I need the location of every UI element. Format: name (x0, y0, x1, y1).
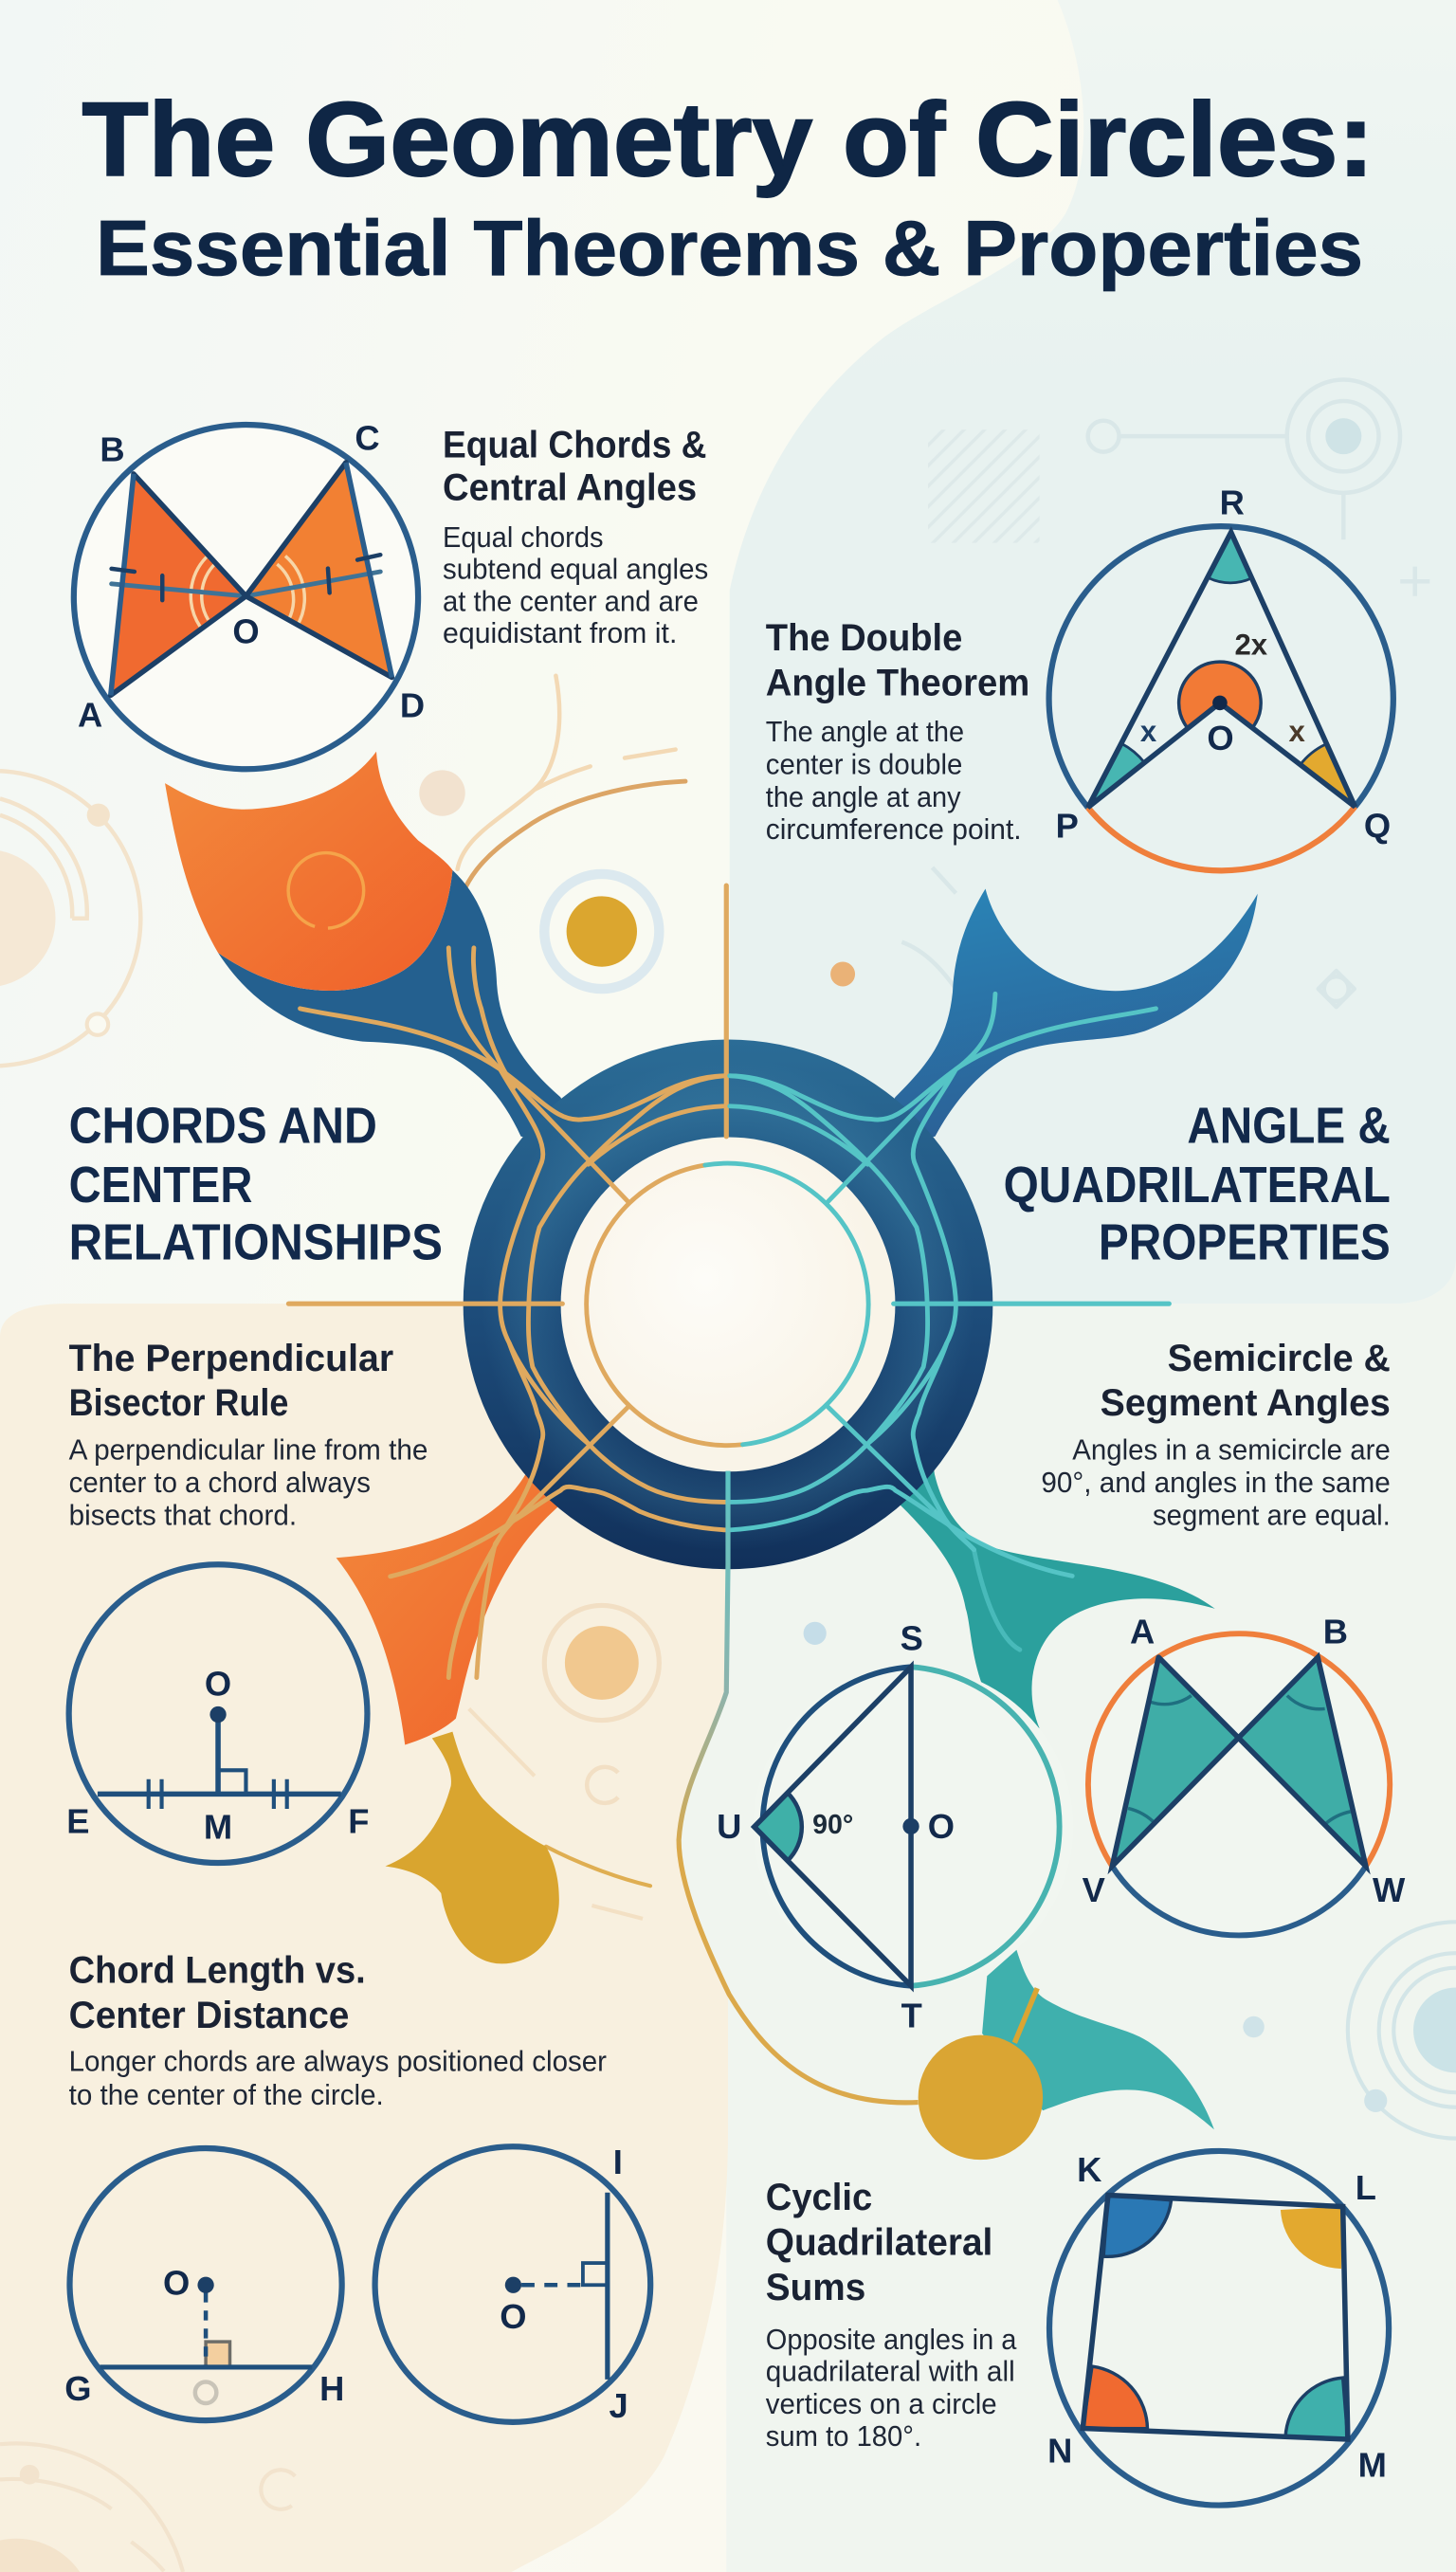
diagram: same segment angles: A (1130, 1613, 1155, 1651)
diagram: perpendicular bisector (66, 1564, 369, 1863)
diagram: semicircle: 90° (812, 1810, 853, 1840)
diagram: cyclic quadrilateral (1047, 2150, 1389, 2506)
panel: equal chords text: Central Angles (443, 467, 697, 509)
diagram: equal chords: O (232, 611, 260, 650)
diagram: perpendicular bisector: M (204, 1807, 232, 1846)
panel: equal chords text: subtend equal angles (443, 555, 708, 586)
icon: gold target (544, 874, 659, 989)
diagram: double angle: P (1056, 806, 1079, 845)
section heading: left: CENTER (69, 1157, 252, 1213)
decoration: peach target (469, 1605, 659, 1919)
diagram: long chord: G (64, 2369, 91, 2408)
panel: chord length text: Longer chords are always positioned closer (69, 2047, 607, 2078)
panel: semicircle text (1041, 1338, 1391, 1532)
panel: semicircle text: Angles in a semicircle are (1072, 1435, 1391, 1467)
decoration: cream dot (419, 770, 465, 816)
diagram: equal chords: A (78, 696, 102, 735)
panel: perpendicular bisector text: The Perpendicular (69, 1338, 393, 1379)
diagram: double angle: x (1140, 715, 1157, 748)
panel: equal chords text: Equal chords (443, 522, 604, 554)
diagram: semicircle: O (928, 1807, 955, 1846)
section heading: left: CHORDS AND (69, 1098, 377, 1155)
diagram: same segment angles (1083, 1613, 1406, 1935)
diagram: semicircle: S (901, 1619, 923, 1658)
diagram: same segment angles: W (1373, 1870, 1406, 1909)
diagram: double angle: R (1220, 483, 1245, 522)
branch: gold drop lower left (385, 1732, 650, 1963)
diagram: perpendicular bisector: O (205, 1664, 231, 1703)
diagram: perpendicular bisector: F (348, 1802, 369, 1841)
diagram: cyclic quadrilateral: L (1356, 2168, 1376, 2207)
panel: double angle text: center is double (766, 749, 962, 780)
diagram: cyclic quadrilateral: N (1047, 2432, 1072, 2471)
diagram: double angle: x (1289, 715, 1306, 748)
title (82, 82, 1374, 292)
diagram: equal chords: D (400, 685, 425, 724)
diagram: semicircle: T (901, 1996, 922, 2034)
panel: chord length text (69, 1949, 607, 2111)
panel: perpendicular bisector text: bisects that chord. (69, 1501, 297, 1532)
diagram: short chord (375, 2143, 650, 2425)
panel: perpendicular bisector text (69, 1338, 428, 1532)
panel: cyclic quadrilateral text: quadrilateral with all (766, 2357, 1015, 2388)
panel: chord length text: Center Distance (69, 1995, 349, 2036)
branch: blue leaf upper right (869, 889, 1258, 1148)
connectors: gold flow lines (288, 948, 726, 1678)
panel: semicircle text: 90°, and angles in the same (1041, 1468, 1391, 1499)
branch: teal leaf lower right (869, 1451, 1215, 1728)
panel: semicircle text: Semicircle & (1168, 1338, 1391, 1379)
panel: chord length text: to the center of the circle. (69, 2080, 384, 2111)
diagram: equal chords (74, 418, 425, 769)
panel: cyclic quadrilateral text: Opposite angles in a (766, 2325, 1017, 2356)
panel: perpendicular bisector text: A perpendicular line from the (69, 1435, 428, 1467)
diagram: cyclic quadrilateral: M (1358, 2445, 1387, 2484)
diagram: same segment angles: V (1083, 1870, 1105, 1909)
diagram: same segment angles: B (1323, 1613, 1348, 1651)
panel: perpendicular bisector text: center to a chord always (69, 1468, 371, 1499)
central hub (464, 1040, 992, 1569)
panel: cyclic quadrilateral text (766, 2177, 1017, 2453)
panel: equal chords text: Equal Chords & (443, 425, 707, 466)
diagram: equal chords: C (355, 418, 380, 457)
panel: chord length text: Chord Length vs. (69, 1949, 366, 1991)
diagram: short chord: O (500, 2297, 527, 2336)
axis: left (288, 1303, 562, 1305)
diagram: long chord (64, 2148, 344, 2420)
decoration: right rings (804, 1622, 1456, 2139)
axis: top (725, 885, 728, 1137)
diagram: semicircle: U (717, 1807, 741, 1846)
diagram: double angle: O (1207, 719, 1234, 757)
panel: perpendicular bisector text: Bisector Rule (69, 1382, 288, 1424)
decoration: left rings (0, 771, 140, 1066)
panel: cyclic quadrilateral text: sum to 180°. (766, 2421, 921, 2453)
title: Essential Theorems & Properties (96, 204, 1363, 292)
panel: double angle text: The Double (766, 617, 962, 659)
diagram: long chord: H (319, 2369, 344, 2408)
panel: equal chords text (443, 425, 708, 649)
diagram: cyclic quadrilateral: K (1077, 2150, 1101, 2189)
diagram: equal chords: B (100, 429, 125, 468)
diagram: semicircle (717, 1619, 1073, 2034)
panel: equal chords text: at the center and are (443, 586, 699, 617)
diagram: short chord: I (613, 2143, 623, 2181)
panel: double angle text: the angle at any (766, 782, 961, 813)
gold node (919, 1988, 1043, 2160)
panel: double angle text: circumference point. (766, 814, 1022, 846)
panel: cyclic quadrilateral text: Cyclic (766, 2177, 872, 2218)
panel: double angle text: The angle at the (766, 717, 964, 748)
branch: orange leaf lower left (337, 1451, 591, 1744)
branch: teal leaf bottom (982, 1950, 1214, 2129)
panel: semicircle text: Segment Angles (1101, 1382, 1391, 1424)
section heading: right: PROPERTIES (1099, 1213, 1391, 1270)
diagram: double angle: 2x (1234, 628, 1268, 661)
section heading: right: QUADRILATERAL (1004, 1157, 1391, 1213)
panel: cyclic quadrilateral text: Quadrilateral (766, 2221, 992, 2263)
panel: cyclic quadrilateral text: vertices on a circle (766, 2389, 997, 2420)
panel: double angle text (766, 617, 1029, 846)
diagram: long chord: O (163, 2263, 190, 2302)
section heading: left (69, 1098, 443, 1270)
diagram: perpendicular bisector: E (66, 1802, 89, 1841)
connector: decorative lines upper left (450, 676, 685, 1004)
axis: right (894, 1303, 1169, 1305)
panel: double angle text: Angle Theorem (766, 662, 1029, 703)
diagram: double angle (1049, 483, 1393, 870)
panel: equal chords text: equidistant from it. (443, 618, 677, 649)
title: The Geometry of Circles: (82, 82, 1374, 198)
connectors: teal flow lines (730, 994, 1169, 1650)
diagram: short chord: J (610, 2386, 628, 2425)
section heading: right: ANGLE & (1187, 1098, 1391, 1155)
connector: curve to gold node (679, 1471, 919, 2103)
panel: cyclic quadrilateral text: Sums (766, 2267, 865, 2308)
diagram: double angle: Q (1364, 806, 1391, 845)
panel: semicircle text: segment are equal. (1153, 1501, 1391, 1532)
section heading: right (1004, 1098, 1391, 1270)
section heading: left: RELATIONSHIPS (69, 1213, 443, 1270)
decoration: top right rings and hatch (830, 379, 1429, 1007)
branch: orange and blue leaf upper left (165, 752, 591, 1148)
decoration: bottom left rings (0, 2443, 295, 2572)
